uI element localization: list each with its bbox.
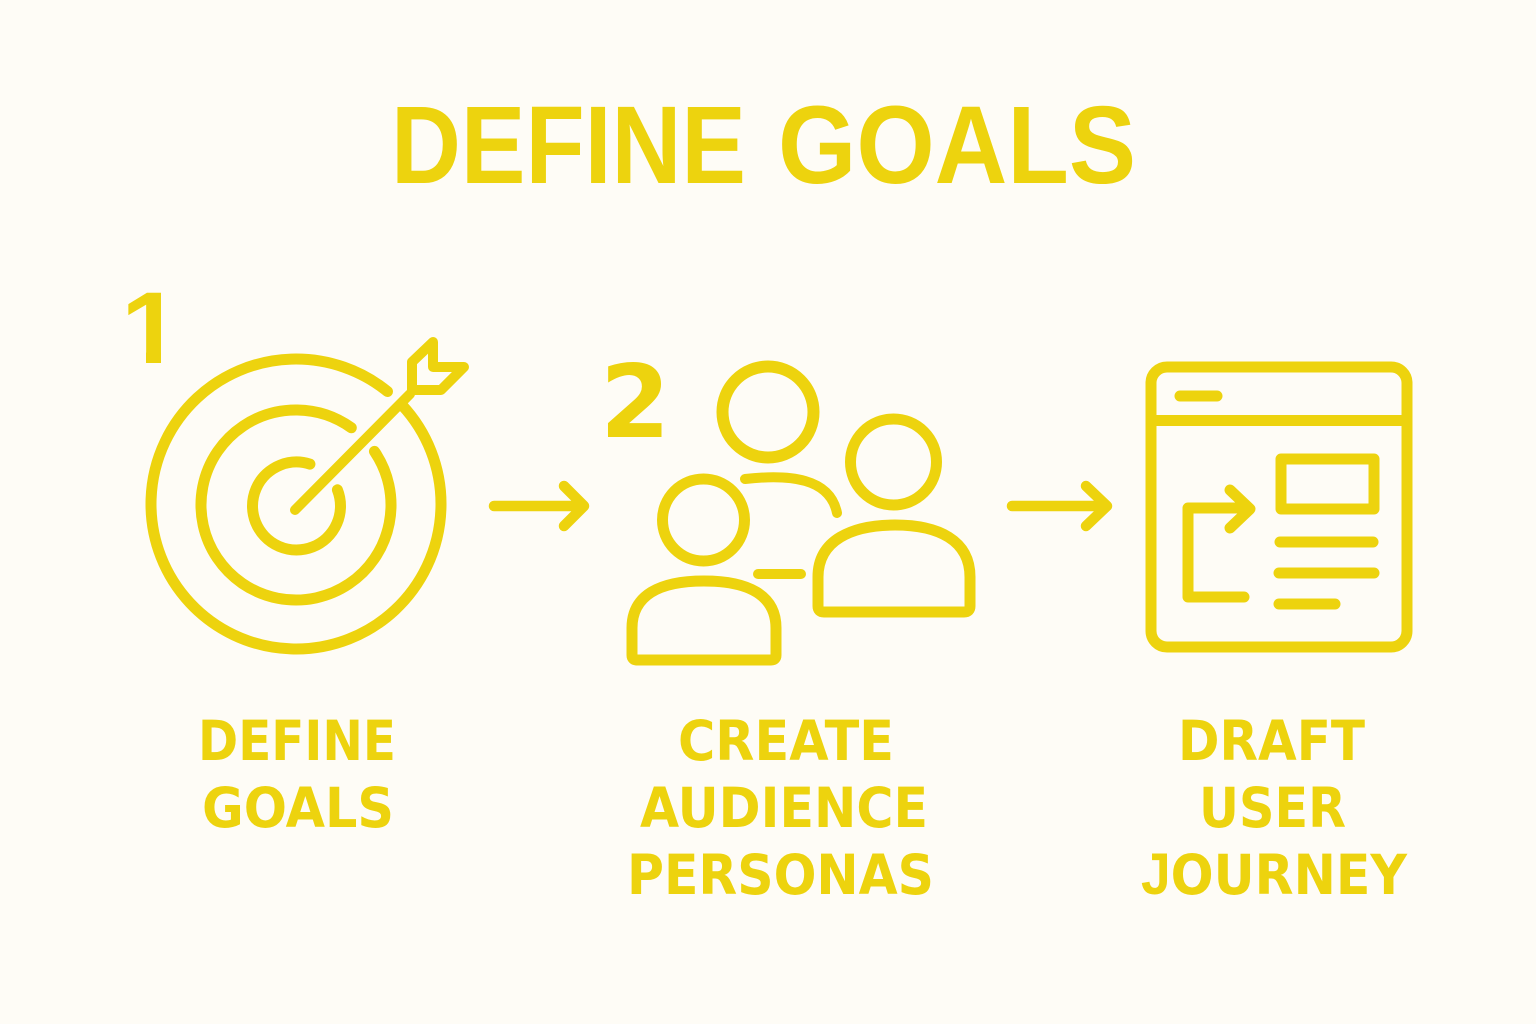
step number 1: 1 bbox=[121, 271, 181, 385]
header dash bbox=[1180, 390, 1217, 402]
label: define goals: GOALS bbox=[202, 776, 394, 840]
label: create audience personas: CREATE bbox=[678, 709, 894, 773]
window header line bbox=[1151, 415, 1407, 426]
arrow: step 1 to step 2 bbox=[494, 486, 584, 526]
title bbox=[391, 84, 1136, 207]
left person head bbox=[662, 479, 744, 561]
title: DEFINE bbox=[391, 84, 746, 207]
label: define goals bbox=[198, 709, 396, 840]
text line 1 bbox=[1280, 536, 1373, 548]
label: draft user journey: USER bbox=[1199, 776, 1346, 840]
inner ring bbox=[239, 449, 354, 563]
icon: user journey window bbox=[1151, 367, 1407, 647]
label: draft user journey: DRAFT bbox=[1178, 709, 1365, 773]
arrow shaft bbox=[295, 394, 410, 510]
icon: target with arrow bbox=[91, 299, 501, 709]
content block bbox=[1281, 459, 1374, 509]
arrow fletching bbox=[412, 342, 464, 390]
label: draft user journey bbox=[1141, 709, 1408, 907]
text line 2 bbox=[1279, 568, 1374, 578]
top person head bbox=[722, 366, 814, 458]
bracket arrow bbox=[1188, 490, 1250, 597]
left person body bbox=[632, 581, 776, 660]
label: define goals: DEFINE bbox=[198, 709, 396, 773]
window frame bbox=[1151, 367, 1407, 647]
connector dash bbox=[758, 569, 801, 579]
outer ring bbox=[91, 299, 501, 709]
label: create audience personas bbox=[627, 709, 934, 907]
label: create audience personas: AUDIENCE bbox=[640, 776, 928, 840]
top person shoulder bbox=[745, 477, 837, 513]
right person body bbox=[818, 525, 970, 612]
step number 2: 2 bbox=[600, 343, 670, 461]
title: GOALS bbox=[778, 84, 1136, 207]
icon: audience personas bbox=[632, 366, 970, 660]
label: create audience personas: PERSONAS bbox=[627, 843, 934, 907]
text line 3 bbox=[1279, 598, 1335, 610]
middle ring bbox=[164, 373, 428, 637]
label: draft user journey: JOURNEY bbox=[1141, 842, 1408, 907]
right person head bbox=[850, 419, 936, 505]
arrow: step 2 to step 3 bbox=[1012, 486, 1107, 526]
